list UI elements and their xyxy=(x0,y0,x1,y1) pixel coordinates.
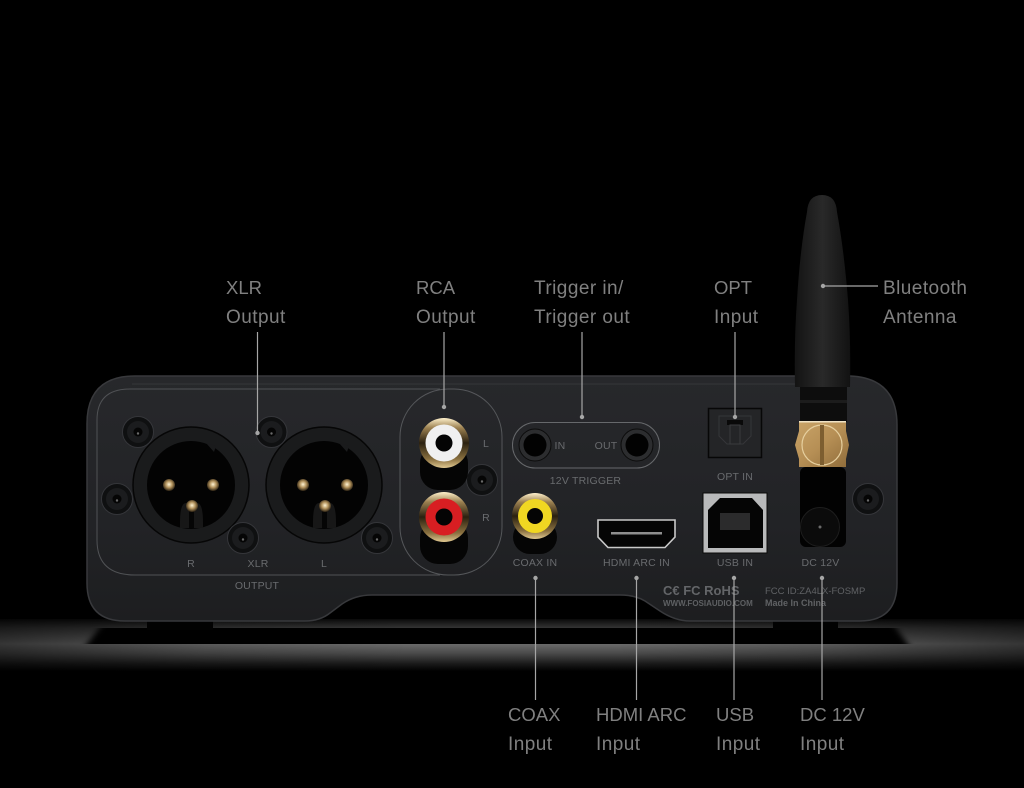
callout: HDMI ARC input xyxy=(596,576,686,755)
compliance marks: C€ FC RoHS xyxy=(663,583,740,598)
callout: COAX input: COAX xyxy=(508,704,560,725)
callout: XLR output xyxy=(226,277,286,435)
callout: RCA output xyxy=(416,277,476,409)
brass antenna nut xyxy=(795,421,849,467)
panel printed labels: L xyxy=(321,558,327,570)
connector: XLR right xyxy=(133,427,249,543)
callout: COAX input xyxy=(508,576,560,755)
callout: DC 12V input: Input xyxy=(800,734,845,755)
panel printed labels: XLR xyxy=(247,558,269,570)
callout: trigger in and out xyxy=(534,278,630,419)
connector: RCA white xyxy=(419,418,469,490)
panel printed labels: OUTPUT xyxy=(235,580,280,592)
panel screws xyxy=(102,416,884,554)
compliance marks: Made In China xyxy=(765,598,827,608)
panel printed labels: HDMI ARC IN xyxy=(603,557,670,569)
connector: 12V trigger xyxy=(512,422,660,468)
callout: XLR output: XLR xyxy=(226,277,262,298)
callout: Bluetooth antenna xyxy=(821,278,967,328)
panel printed labels xyxy=(187,438,839,592)
panel printed labels: 12V TRIGGER xyxy=(550,475,621,487)
Bluetooth antenna xyxy=(795,195,850,422)
compliance marks: WWW.FOSIAUDIO.COM xyxy=(663,599,753,608)
callout: RCA output: RCA xyxy=(416,277,456,298)
panel outline: RCA group xyxy=(400,389,502,575)
callout: HDMI ARC input: Input xyxy=(596,734,641,755)
callout: COAX input: Input xyxy=(508,734,553,755)
callout: trigger in and out: Trigger out xyxy=(534,307,630,328)
callout: Bluetooth antenna: Antenna xyxy=(883,307,957,328)
callout: OPT input xyxy=(714,277,759,419)
shelf surface xyxy=(0,618,1024,671)
compliance marks xyxy=(663,583,865,608)
callout: DC 12V input xyxy=(800,576,865,755)
panel printed labels: OPT IN xyxy=(717,471,753,483)
panel outline: output group xyxy=(97,389,440,575)
callout: OPT input: Input xyxy=(714,307,759,328)
callout: OPT input: OPT xyxy=(714,277,752,298)
connector: coaxial xyxy=(512,493,558,554)
panel printed labels: USB IN xyxy=(717,557,753,569)
callout: USB input: USB xyxy=(716,704,754,725)
connector: HDMI xyxy=(598,520,675,548)
panel printed labels: L xyxy=(483,438,489,450)
connector: XLR left xyxy=(266,427,382,543)
device body xyxy=(87,376,897,621)
connector: optical xyxy=(708,408,762,458)
connector: USB B xyxy=(703,493,767,553)
panel printed labels: IN xyxy=(555,440,565,452)
callout: USB input xyxy=(716,576,761,755)
compliance marks: FCC ID:ZA4LX-FOSMP xyxy=(765,586,865,597)
panel printed labels: COAX IN xyxy=(513,557,557,569)
panel printed labels: OUT xyxy=(595,440,618,452)
callout: USB input: Input xyxy=(716,734,761,755)
antenna shadow and DC jack xyxy=(800,467,846,547)
callout: DC 12V input: DC 12V xyxy=(800,704,865,725)
connector: RCA red xyxy=(419,492,469,564)
panel printed labels: DC 12V xyxy=(802,557,839,569)
callout: trigger in and out: Trigger in/ xyxy=(534,278,624,299)
callout: XLR output: Output xyxy=(226,307,286,328)
callout: Bluetooth antenna: Bluetooth xyxy=(883,278,967,299)
callout: RCA output: Output xyxy=(416,307,476,328)
panel printed labels: R xyxy=(187,558,195,570)
callout: HDMI ARC input: HDMI ARC xyxy=(596,704,686,725)
panel printed labels: R xyxy=(482,512,490,524)
